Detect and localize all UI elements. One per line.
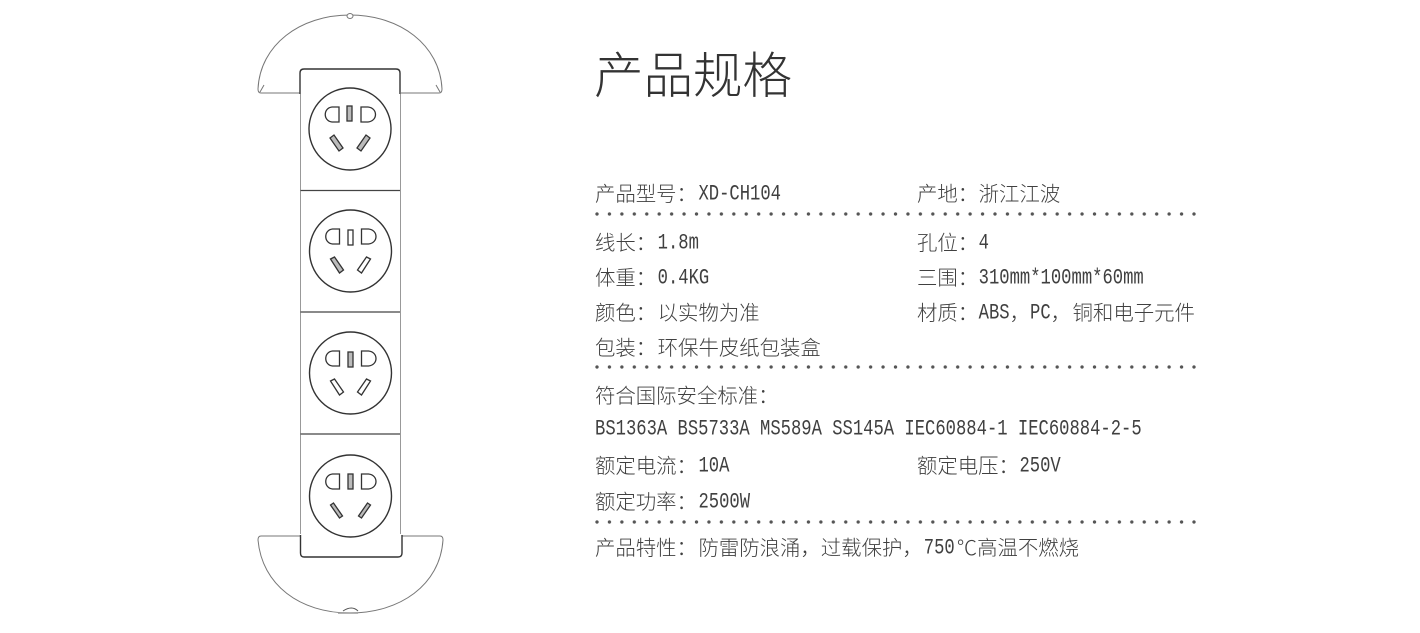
spec: model: XD-CH104 [698, 183, 781, 207]
spec: rated power [595, 485, 750, 515]
spec: model [595, 177, 781, 207]
spec: cord length [595, 226, 699, 256]
spec: dimensions: 310mm*100mm*60mm [979, 267, 1144, 291]
spec: colour: 颜色：以实物为准 [595, 296, 760, 326]
dotted divider 2 [595, 365, 1199, 369]
spec: weight: 体重： [595, 261, 656, 291]
socket 2 [310, 210, 392, 292]
spec: cord length: 线长： [595, 226, 656, 256]
spec: outlets: 4 [979, 232, 989, 256]
socket 3 [310, 332, 392, 414]
socket 1 [309, 88, 391, 170]
spec: weight [595, 261, 709, 291]
standards heading: 符合国际安全标准： [595, 379, 779, 409]
spec: outlets: 孔位： [917, 226, 978, 256]
spec: packaging: 包装：环保牛皮纸包装盒 [595, 331, 821, 361]
spec: features: 产品特性：防雷防浪涌，过载保护， ℃高温不燃烧 [595, 531, 1079, 561]
spec: material: 材质： ， ，铜和电子元件 [917, 296, 1195, 326]
spec: dimensions [917, 261, 1144, 291]
dotted divider 3 [595, 520, 1199, 524]
spec: model: 产品型号： [595, 177, 697, 207]
spec: rated current: 10A [698, 455, 729, 479]
illustration: power strip with four sockets [258, 13, 444, 614]
spec: cord length: 1.8m [658, 232, 699, 256]
spec: dimensions: 三围： [917, 261, 978, 291]
title: 产品规格 [594, 37, 792, 108]
spec: material: ABS [979, 302, 1010, 326]
top end cap [258, 14, 442, 93]
spec: features: 750 [924, 537, 955, 561]
spec: origin: 产地：浙江江波 [917, 177, 1060, 207]
spec: rated current: 额定电流： [595, 449, 697, 479]
spec: rated power: 额定功率： [595, 485, 697, 515]
spec: weight: 0.4KG [658, 267, 709, 291]
spec: rated voltage: 250V [1019, 455, 1061, 479]
dotted divider 1 [595, 212, 1199, 216]
spec: rated voltage: 额定电压： [917, 449, 1019, 479]
spec: material: PC [1030, 302, 1051, 326]
standards list: BS1363A BS5733A MS589A SS145A IEC60884-1 IEC60884-2-5 [595, 418, 1142, 442]
spec: rated power: 2500W [698, 491, 750, 515]
strip body [300, 69, 402, 557]
bottom end cap [258, 536, 443, 613]
socket 4 [310, 455, 392, 537]
